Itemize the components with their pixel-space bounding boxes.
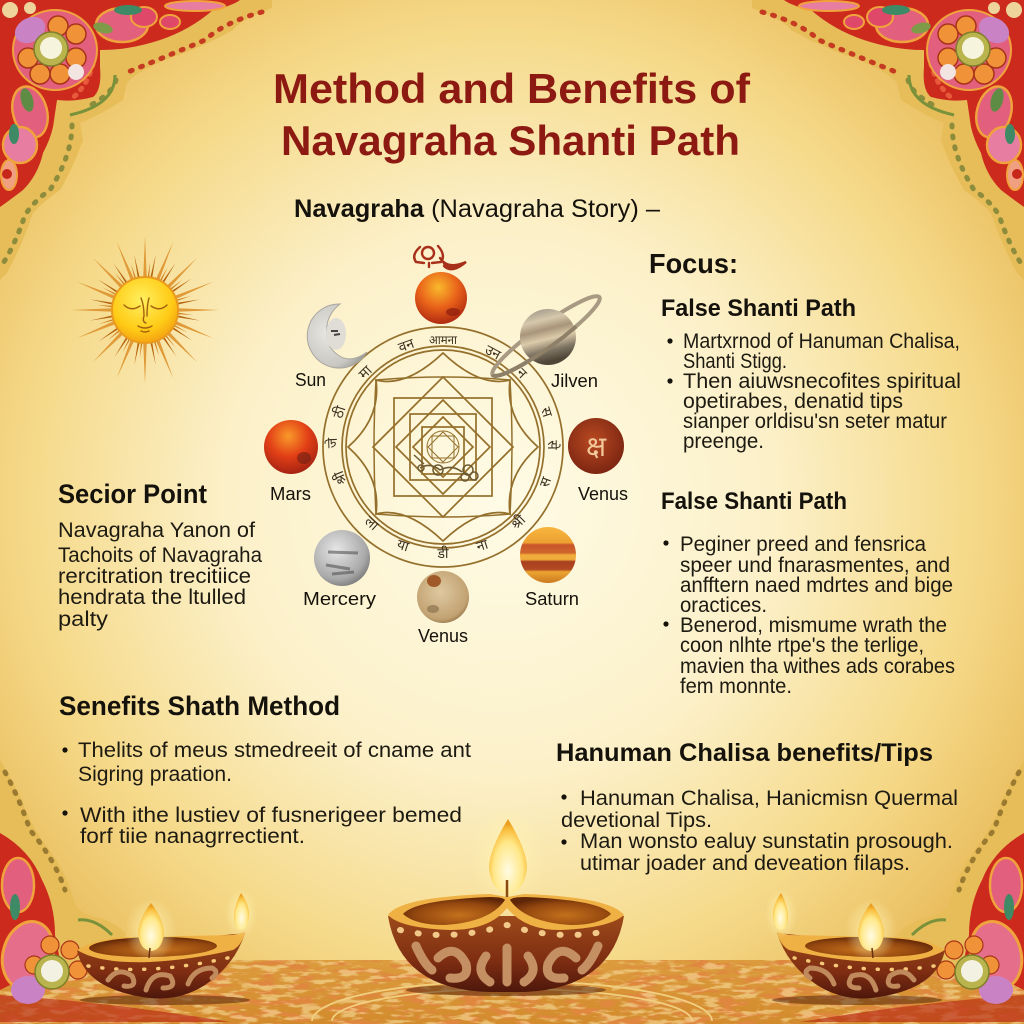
planet: top orange — [415, 272, 467, 324]
yantra mandala — [323, 327, 563, 567]
heading: senefits shath method: Senefits Shath Method — [59, 691, 340, 721]
bullet list one: sianper orldisu'sn seter matur — [683, 410, 947, 433]
bullet list: hanuman: Man wonsto ealuy sunstatin prosough. — [580, 830, 953, 853]
paragraph: secior point: Navagraha Yanon of — [58, 519, 255, 542]
bullet list: hanuman: devetional Tips. — [561, 809, 712, 832]
planet: crescent moon — [307, 304, 367, 368]
mandala ring lettering: श्री — [330, 468, 350, 487]
bullet list: hanuman: Hanuman Chalisa, Hanicmisn Quermal — [580, 787, 958, 810]
mandala ring lettering: मा — [355, 362, 375, 382]
mandala ring lettering: श्री — [508, 511, 529, 532]
heading: false shanti path one: False Shanti Path — [661, 295, 856, 322]
mandala ring lettering: या — [395, 536, 411, 555]
mandala ring lettering: आमना — [429, 333, 458, 347]
floor carpet — [0, 960, 1024, 1024]
planet labels: Venus — [418, 626, 468, 646]
bullet list: senefits: Thelits of meus stmedreeit of cname ant — [78, 739, 471, 762]
bullet list two — [663, 533, 955, 698]
bullet list: senefits: Sigring praation. — [78, 763, 232, 786]
paragraph: secior point — [58, 519, 262, 631]
heading: hanuman chalisa tips: Hanuman Chalisa benefits/Tips — [556, 739, 933, 767]
bullet list two: mavien tha withes ads corabes — [680, 655, 955, 678]
paragraph: secior point: rercitration trecitiice — [58, 565, 251, 588]
text block: secior point — [58, 479, 262, 631]
bullet list two: speer und fnarasmentes, and — [680, 554, 950, 577]
paragraph: secior point: hendrata the ltulled — [58, 586, 246, 609]
bullet list one: Martxrnod of Hanuman Chalisa, — [683, 330, 960, 353]
bullet list two: anfftern naed mdrtes and bige — [680, 574, 953, 597]
mandala ring lettering: डी — [436, 545, 449, 561]
title: Method and Benefits of — [273, 65, 751, 112]
planet: striped — [520, 527, 576, 583]
heading: focus: Focus: — [649, 248, 738, 279]
subtitle: Navagraha (Navagraha Story) – — [294, 195, 660, 223]
title — [273, 65, 751, 164]
heading: false shanti path two: False Shanti Path — [661, 488, 847, 515]
corner ornament: bottom left — [0, 760, 126, 1004]
bullet list one: opetirabes, denatid tips — [683, 390, 903, 413]
icon: left diya lamp — [77, 889, 257, 1005]
title: Navagraha Shanti Path — [281, 117, 740, 164]
icon: right diya lamp — [765, 889, 945, 1005]
planet: tan — [417, 571, 469, 623]
bullet list: hanuman: utimar joader and deveation filaps. — [580, 852, 910, 875]
planet labels — [270, 370, 628, 646]
planet: red with glyph: क्ष — [586, 431, 607, 462]
mandala ring lettering — [324, 333, 561, 561]
text block: hanuman chalisa tips — [556, 739, 958, 875]
bullet list one: preenge. — [683, 430, 764, 453]
paragraph: secior point: Tachoits of Navagraha — [58, 544, 262, 567]
mandala ring lettering: जे — [324, 437, 340, 448]
planet: red — [264, 420, 318, 474]
icon: sun with serene face — [71, 236, 219, 384]
planet labels: Jilven — [551, 371, 598, 391]
bullet list: senefits: forf tiie nanagrrectient. — [80, 825, 305, 848]
icon: central diya lamp — [388, 806, 624, 996]
bullet list: hanuman — [561, 787, 958, 875]
mandala ring lettering: स — [536, 474, 554, 489]
bullet list two: Peginer preed and fensrica — [680, 533, 926, 556]
text block: false shanti path two — [661, 488, 955, 698]
bullet list two: oractices. — [680, 594, 767, 617]
mandala ring lettering: ना — [474, 536, 490, 554]
mandala ring lettering: वन — [396, 335, 416, 355]
planet labels: Venus — [578, 484, 628, 504]
mandala ring lettering: से — [545, 440, 561, 450]
bullet list two: coon nlhte rtpe's the terlige, — [680, 634, 924, 657]
corner ornament: bottom right — [898, 760, 1024, 1004]
planet labels: Mercery — [303, 589, 376, 609]
planet: red with glyph — [568, 418, 624, 474]
bullet list two: fem monnte. — [680, 675, 792, 698]
planet: ringed planet — [486, 288, 606, 384]
bullet list one: Shanti Stigg. — [683, 350, 787, 373]
bullet list one: Then aiuwsnecofites spiritual — [683, 370, 961, 393]
mandala ring lettering: ठी — [330, 404, 349, 420]
text block: senefits shath method — [59, 691, 471, 848]
mandala ring lettering: स — [538, 405, 556, 419]
paragraph: secior point: palty — [58, 608, 109, 631]
corner ornament: top left — [0, 0, 272, 280]
text block: focus — [649, 248, 961, 453]
corner ornament: top right — [752, 0, 1024, 280]
icon: top symbol — [414, 246, 466, 269]
heading: secior point: Secior Point — [58, 479, 207, 509]
mandala ring lettering: न — [514, 365, 531, 382]
mandala ring lettering: ला — [362, 513, 383, 534]
bullet list: senefits — [62, 739, 471, 848]
bullet list: senefits: With ithe lustiev of fusnerigeer bemed — [80, 804, 462, 827]
bullet list two: Benerod, mismume wrath the — [680, 614, 947, 637]
planet labels: Saturn — [525, 589, 579, 609]
bullet list one — [667, 330, 961, 453]
mandala ring lettering: उन — [482, 341, 504, 363]
planet labels: Mars — [270, 484, 311, 504]
planet: grey — [314, 530, 370, 586]
planet labels: Sun — [295, 370, 326, 390]
